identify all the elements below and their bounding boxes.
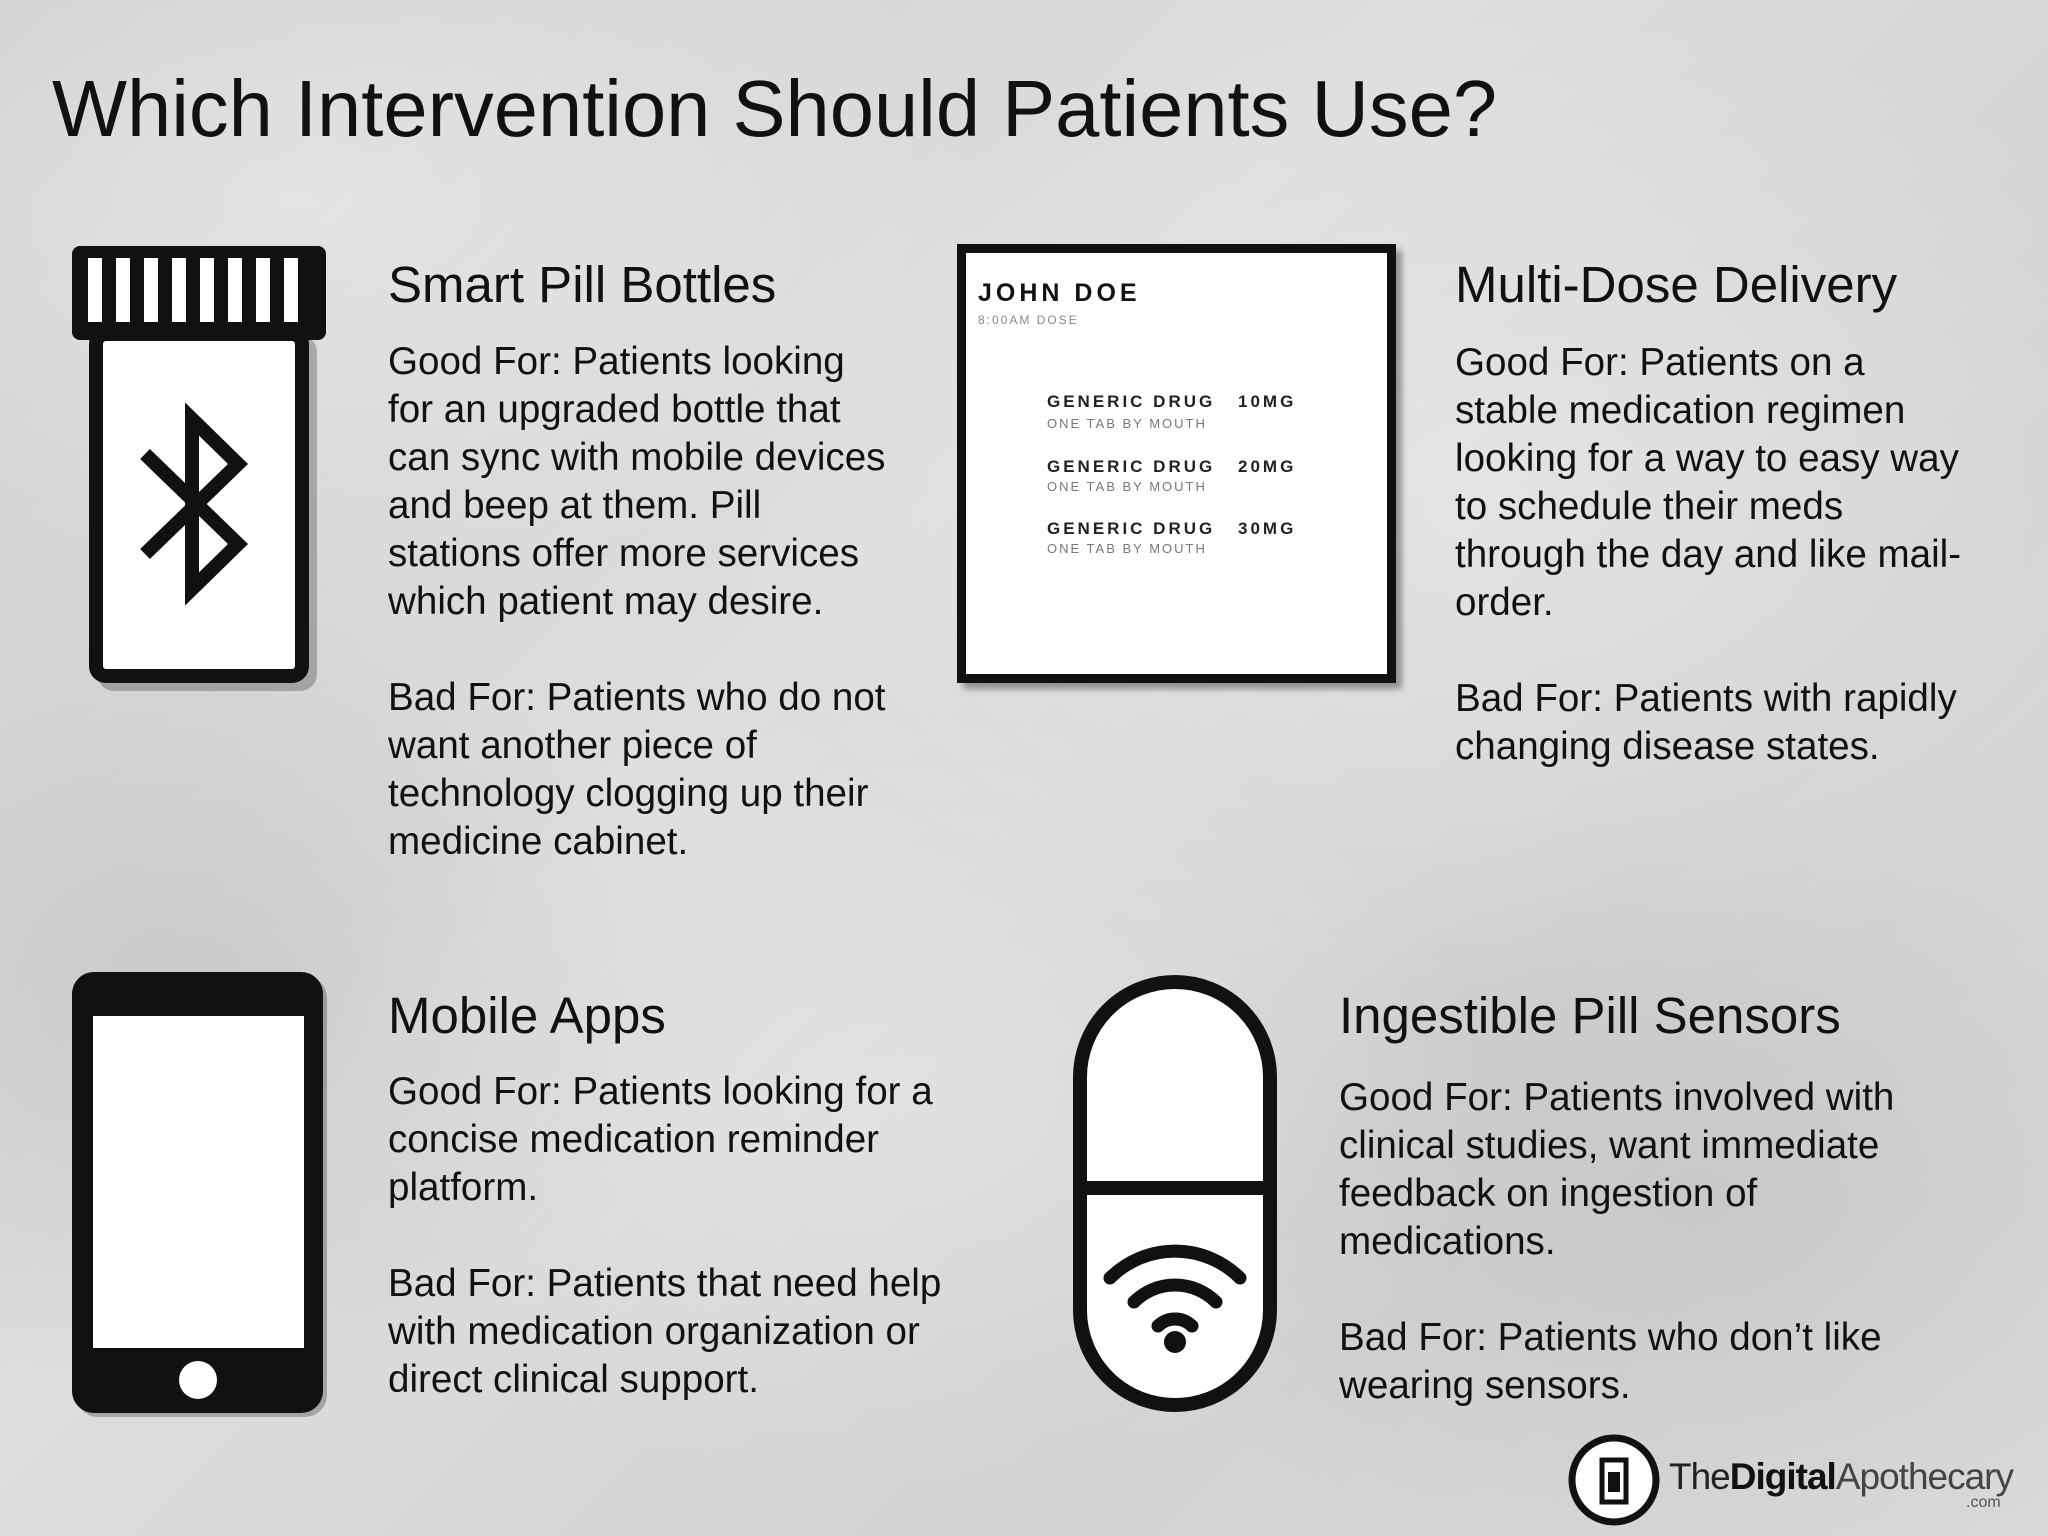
- logo: The Digital Apothecary: .com: [1966, 1494, 2001, 1511]
- text: smart pill bottles: medicine cabinet.: [388, 820, 688, 863]
- text: smart pill bottles: technology clogging up their: [388, 772, 868, 815]
- logo: The Digital Apothecary: [1568, 1434, 2014, 1526]
- text: multi-dose delivery: stable medication regimen: [1455, 389, 1905, 432]
- icon: logo circle: [1568, 1434, 1660, 1526]
- text: mobile apps: direct clinical support.: [388, 1358, 759, 1401]
- heading: smart pill bottles: Smart Pill Bottles: [388, 256, 776, 313]
- icon: multi-dose label: ONE TAB BY MOUTH: [1047, 416, 1207, 431]
- icon: multi-dose label: 30MG: [1238, 519, 1296, 538]
- text: smart pill bottles: can sync with mobile devices: [388, 436, 885, 479]
- text: multi-dose delivery: Good For: Patients on a: [1455, 341, 1865, 384]
- text: smart pill bottles: Bad For: Patients who do not: [388, 676, 886, 719]
- text: mobile apps: [388, 1070, 941, 1401]
- text: ingestible pill sensors: clinical studies, want immediate: [1339, 1124, 1879, 1167]
- panel: ingestible pill sensors: [1339, 987, 1894, 1407]
- text: ingestible pill sensors: medications.: [1339, 1220, 1556, 1263]
- icon: multi-dose label: 20MG: [1238, 457, 1296, 476]
- text: smart pill bottles: and beep at them. Pill: [388, 484, 761, 527]
- text: multi-dose delivery: through the day and like mail-: [1455, 533, 1961, 576]
- icon: smart pill bottle: [72, 246, 326, 691]
- text: multi-dose delivery: [1455, 341, 1961, 768]
- text: mobile apps: with medication organization or: [388, 1310, 920, 1353]
- text: smart pill bottles: Good For: Patients looking: [388, 340, 845, 383]
- text: ingestible pill sensors: Bad For: Patients who don’t like: [1339, 1316, 1882, 1359]
- panel: smart pill bottles: [388, 256, 886, 863]
- icon: multi-dose label: JOHN DOE: [978, 279, 1141, 307]
- text: mobile apps: Bad For: Patients that need help: [388, 1262, 941, 1305]
- panel: mobile apps: [388, 987, 941, 1401]
- text: mobile apps: Good For: Patients looking for a: [388, 1070, 933, 1113]
- text: mobile apps: concise medication reminder: [388, 1118, 879, 1161]
- icon: multi-dose label: 10MG: [1238, 392, 1296, 411]
- text: smart pill bottles: which patient may desire.: [388, 580, 823, 623]
- icon: multi-dose label: ONE TAB BY MOUTH: [1047, 541, 1207, 556]
- icon: multi-dose label: GENERIC DRUG: [1047, 457, 1215, 476]
- icon: multi-dose label: GENERIC DRUG: [1047, 519, 1215, 538]
- panel: multi-dose delivery: [1455, 256, 1961, 768]
- heading: ingestible pill sensors: Ingestible Pill Sensors: [1339, 987, 1841, 1044]
- heading: multi-dose delivery: Multi-Dose Delivery: [1455, 256, 1897, 313]
- text: ingestible pill sensors: wearing sensors.: [1339, 1364, 1631, 1407]
- icon: mobile phone: [72, 972, 327, 1417]
- text: ingestible pill sensors: Good For: Patients involved with: [1339, 1076, 1894, 1119]
- heading: mobile apps: Mobile Apps: [388, 987, 666, 1044]
- icon: multi-dose label: GENERIC DRUG: [1047, 392, 1215, 411]
- text: multi-dose delivery: order.: [1455, 581, 1554, 624]
- text: multi-dose delivery: Bad For: Patients with rapidly: [1455, 677, 1957, 720]
- icon: ingestible pill sensor: [1073, 975, 1277, 1412]
- text: mobile apps: platform.: [388, 1166, 538, 1209]
- text: ingestible pill sensors: feedback on ingestion of: [1339, 1172, 1757, 1215]
- text: multi-dose delivery: changing disease states.: [1455, 725, 1880, 768]
- icon: multi-dose label: [957, 244, 1396, 683]
- icon: multi-dose label: ONE TAB BY MOUTH: [1047, 479, 1207, 494]
- text: multi-dose delivery: looking for a way to easy way: [1455, 437, 1959, 480]
- text: logo: TheDigitalApothecary: [1669, 1456, 2013, 1497]
- text: ingestible pill sensors: [1339, 1076, 1894, 1407]
- icon: multi-dose label: 8:00AM DOSE: [978, 313, 1079, 327]
- text: smart pill bottles: for an upgraded bottle that: [388, 388, 841, 431]
- text: smart pill bottles: want another piece of: [388, 724, 757, 767]
- title: Which Intervention Should Patients Use?: [52, 64, 1497, 153]
- text: smart pill bottles: stations offer more services: [388, 532, 859, 575]
- text: multi-dose delivery: to schedule their meds: [1455, 485, 1843, 528]
- text: smart pill bottles: [388, 340, 886, 863]
